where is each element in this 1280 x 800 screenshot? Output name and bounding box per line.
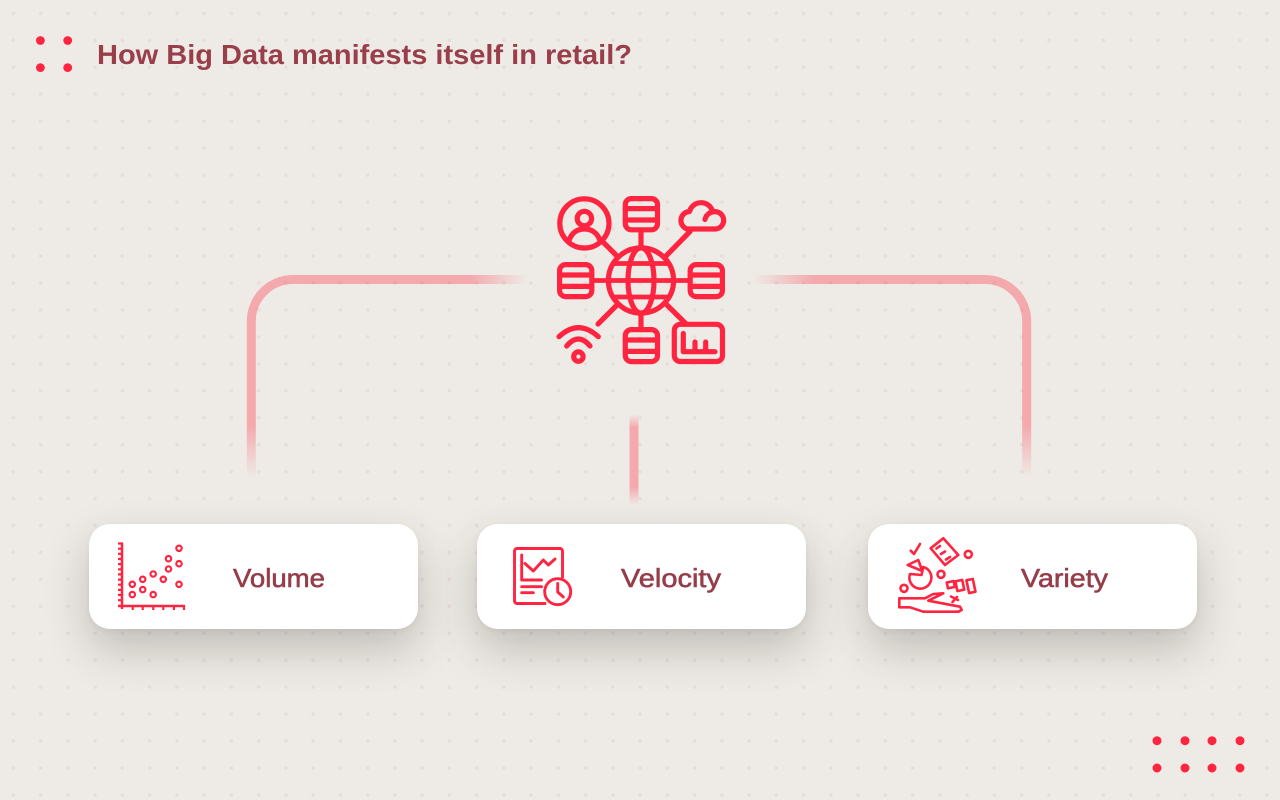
title: How Big Data manifests itself in retail? [97, 39, 632, 70]
card: Variety [868, 524, 1197, 629]
card: Volume [89, 524, 418, 629]
icon part: user [560, 199, 617, 256]
icon part: chart box [667, 305, 722, 362]
icon: big data network [559, 199, 724, 362]
icon part: globe [594, 248, 688, 313]
label: Variety: Variety [1021, 563, 1108, 593]
label: Volume: Volume [233, 563, 325, 593]
connector: right [752, 280, 1027, 478]
icon: scatter plot [118, 543, 185, 610]
decorative red dots: bottom right [1152, 736, 1244, 772]
card: Velocity [477, 524, 806, 629]
icon part: databases [560, 199, 722, 362]
icon part: wifi [559, 305, 617, 361]
connector: centre [630, 414, 638, 505]
icon: report with clock [514, 548, 571, 605]
connector: left [251, 280, 528, 478]
decorative red dots: top left [36, 36, 72, 72]
icon part: cloud [666, 203, 724, 256]
icon: hand with data items [899, 538, 975, 612]
label: Velocity: Velocity [621, 563, 721, 593]
